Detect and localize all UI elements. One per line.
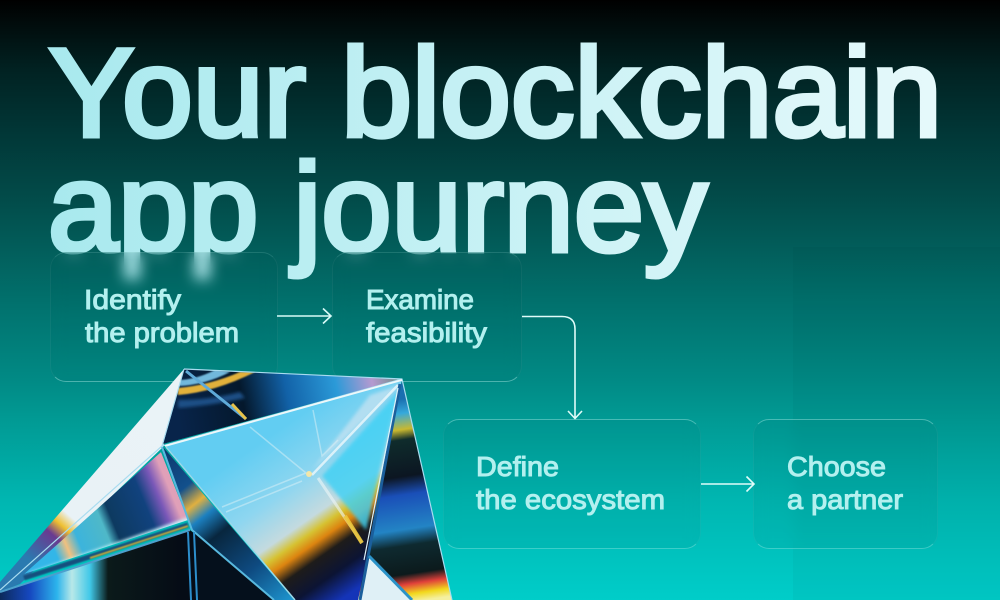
crystal prism (0, 368, 452, 600)
facet: bottom dark (0, 530, 275, 600)
arrow: identify to examine (277, 308, 332, 324)
facet: white left (0, 369, 184, 592)
step card: Examine feasibility: Examine (366, 284, 474, 315)
step card: Define the ecosystem: Define (476, 451, 559, 482)
step card: Choose a partner (753, 419, 938, 549)
step card: Examine feasibility: feasibility (366, 317, 487, 348)
step card: Choose a partner: Choose (787, 451, 886, 482)
facet: top dark (163, 369, 402, 444)
step card: Choose a partner: a partner (787, 484, 903, 515)
facet: bottom right light (358, 556, 412, 600)
step card: Examine feasibility (332, 252, 522, 382)
title: app journey (48, 139, 707, 278)
arrow: examine to define (522, 316, 582, 420)
facet: left lower strip (24, 525, 188, 578)
step card: Identify the problem (50, 252, 278, 382)
facet: left blue (24, 452, 190, 576)
step card: Define the ecosystem: the ecosystem (476, 484, 665, 515)
facet: side wedge (163, 447, 294, 600)
step card: Identify the problem: Identify (84, 284, 181, 315)
step card: Define the ecosystem (443, 419, 701, 549)
arrow: define to choose (701, 476, 755, 492)
facet: main light (166, 379, 402, 600)
step card: Identify the problem: the problem (85, 317, 239, 348)
facet: right side (358, 381, 452, 600)
title (47, 24, 942, 290)
title: Your blockchain (49, 24, 942, 163)
facet edges (0, 369, 452, 600)
